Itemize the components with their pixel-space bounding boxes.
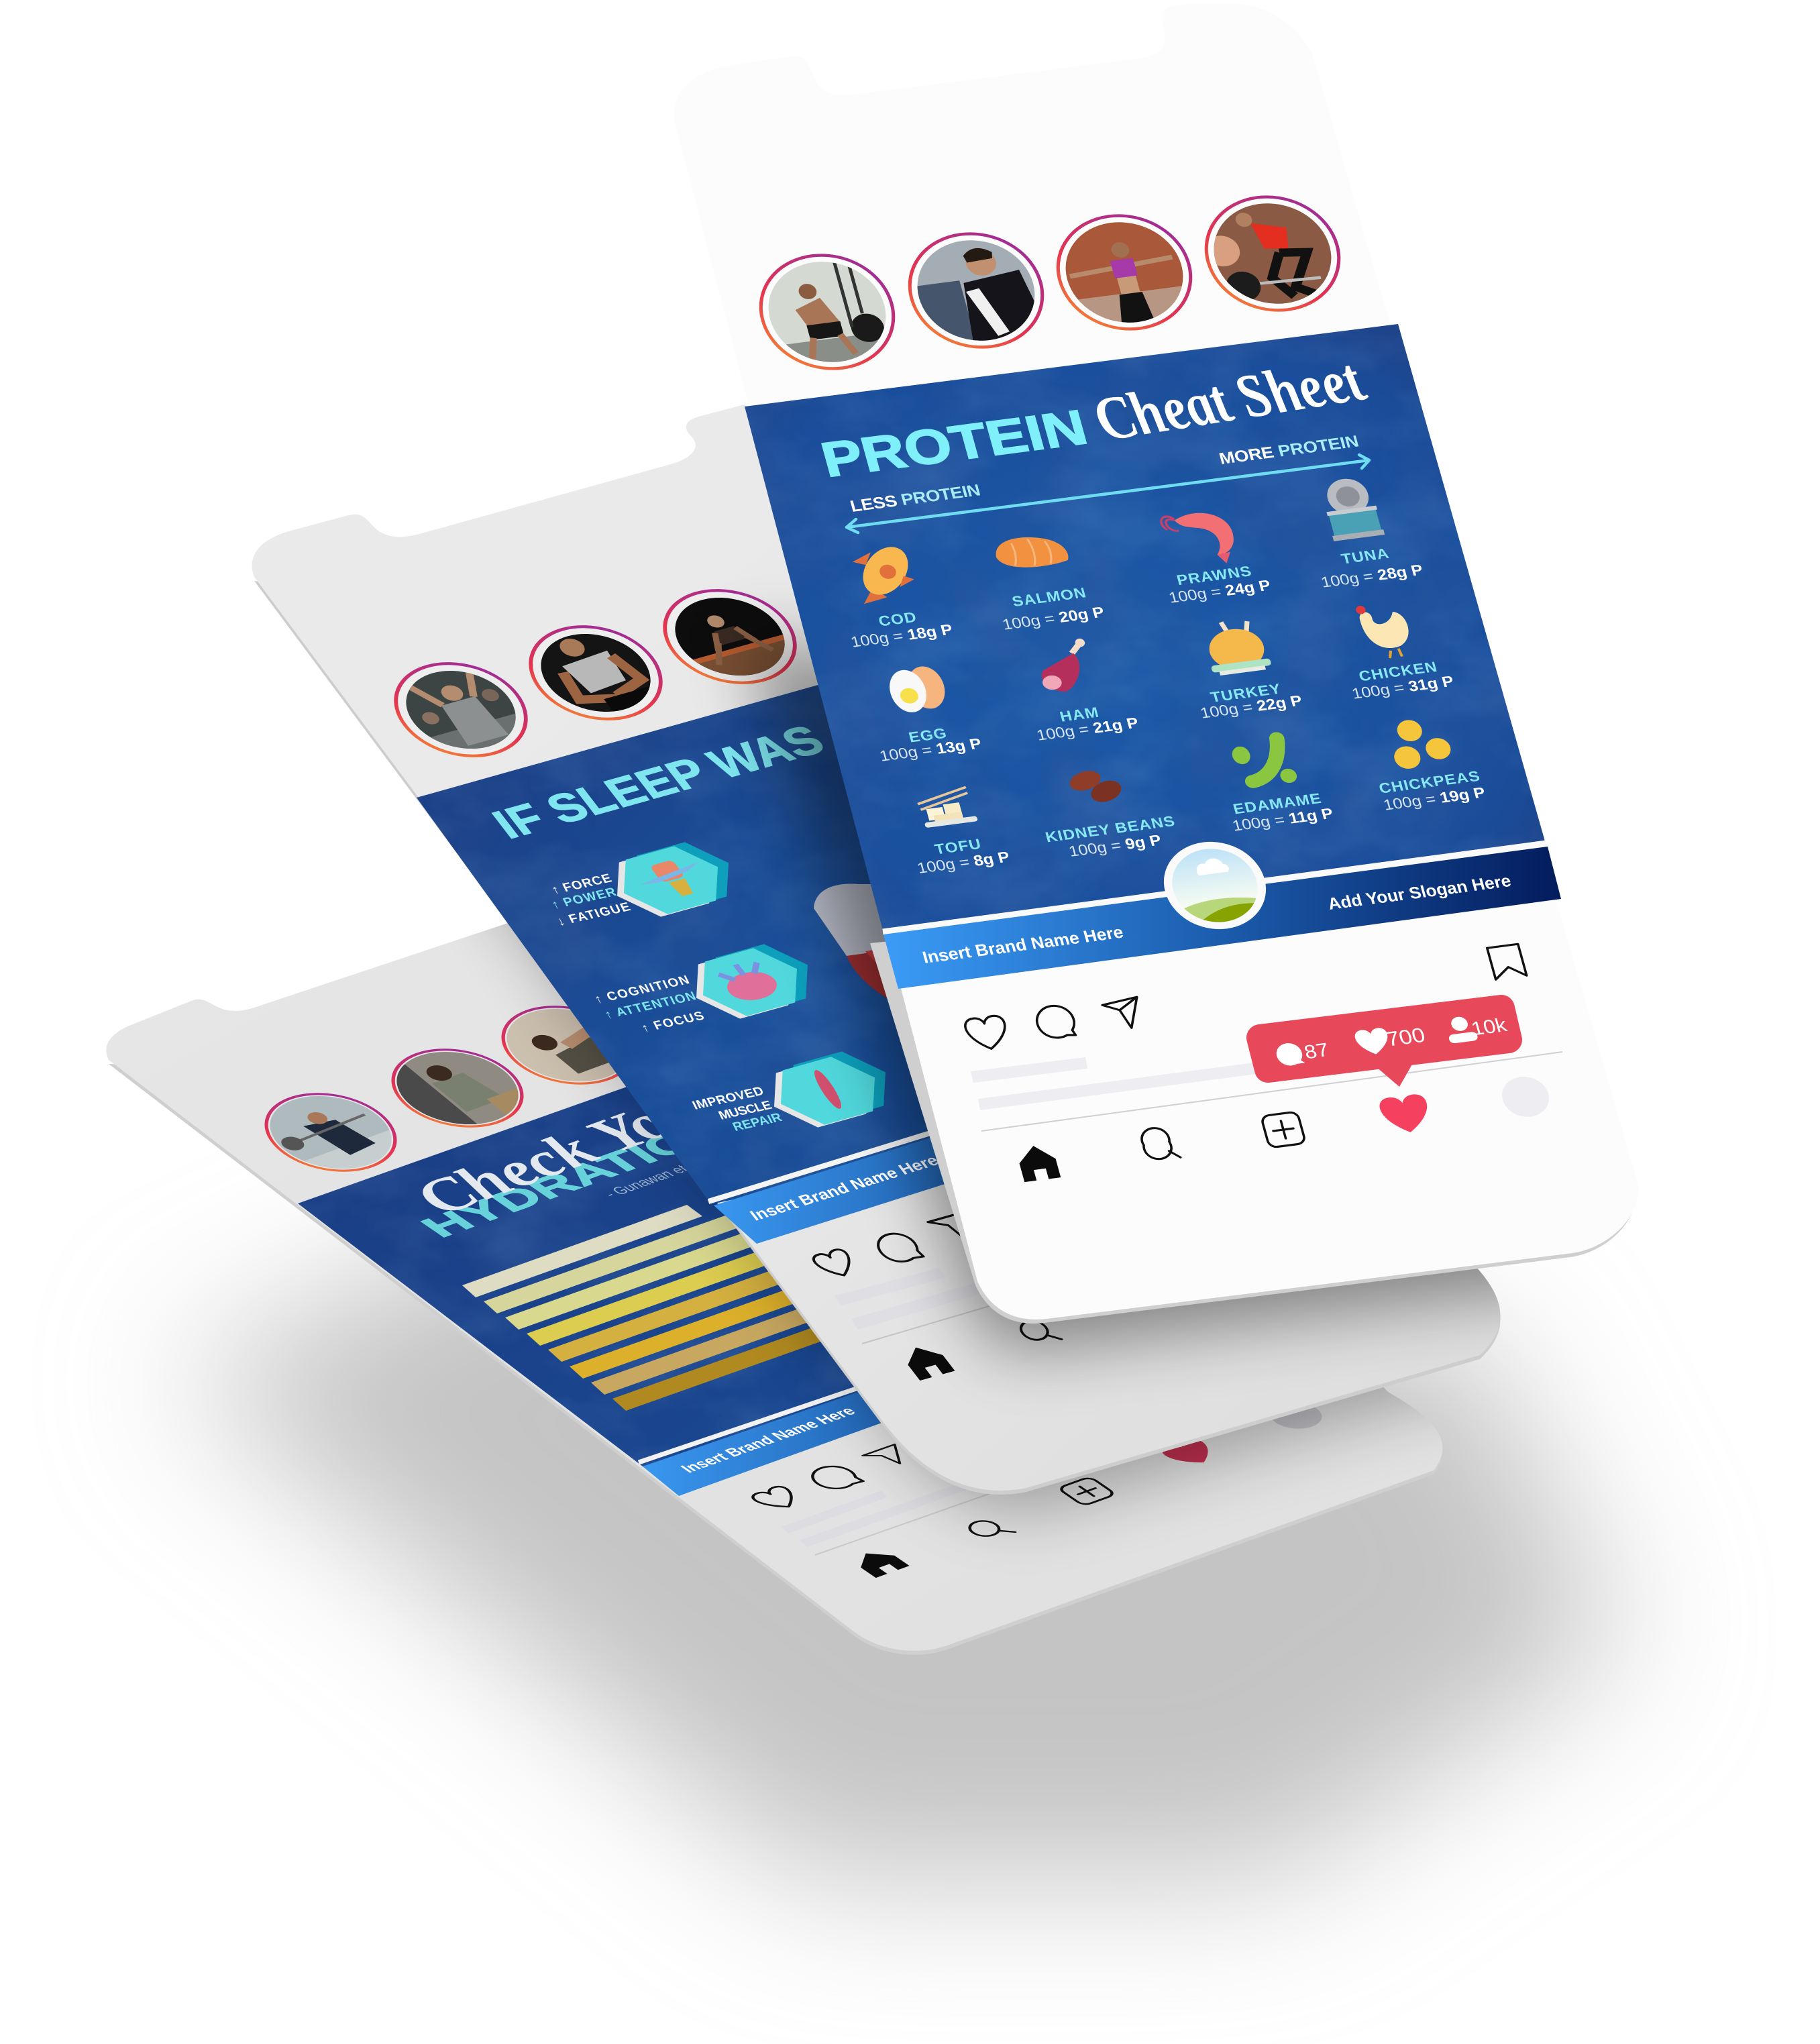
icon: brain bbox=[712, 958, 784, 1005]
text placeholder bars bbox=[971, 1057, 1256, 1110]
food: prawns: 100g = 24g P bbox=[1167, 577, 1273, 606]
food: chicken: CHICKEN bbox=[1357, 658, 1439, 684]
icon: comment bubble bbox=[1033, 1004, 1078, 1040]
food: tofu: TOFU bbox=[932, 835, 983, 857]
icon: fist with lightning bbox=[630, 854, 717, 904]
story 3: woman stretching bbox=[501, 1006, 619, 1085]
food: tofu: 100g = 8g P bbox=[915, 849, 1012, 877]
brand band: front phone: Insert Brand Name Here bbox=[920, 922, 1126, 967]
post actions: middle phone bbox=[810, 1212, 1073, 1381]
story circles: front phone bbox=[745, 188, 1354, 378]
story 1: barbell man bbox=[264, 1093, 397, 1172]
heading: Protein Cheat Sheet: Cheat Sheet bbox=[1078, 346, 1379, 453]
food: chickpeas bbox=[1377, 716, 1487, 814]
brand band: front phone: Add Your Slogan Here bbox=[1326, 871, 1513, 913]
food: egg: EGG bbox=[907, 724, 949, 745]
food: cod: 100g = 18g P bbox=[849, 621, 955, 651]
story 4: man in red shirt lifting bbox=[1191, 188, 1354, 319]
profile dot bbox=[1497, 1074, 1554, 1120]
food: tuna: 100g = 28g P bbox=[1319, 561, 1425, 591]
food: chicken: 100g = 31g P bbox=[1350, 673, 1456, 702]
icon: comment bubble bbox=[804, 1462, 865, 1493]
icon: heart bbox=[1353, 1027, 1392, 1057]
notification bubble: 87 700 10k bbox=[1260, 1008, 1509, 1087]
food: kidney beans: 100g = 9g P bbox=[1067, 832, 1163, 860]
food: edamame: 100g = 11g P bbox=[1230, 805, 1335, 835]
icon: home bbox=[1015, 1144, 1061, 1182]
icon: heart outline bbox=[810, 1248, 860, 1280]
food: kidney beans bbox=[1043, 764, 1177, 860]
brand band: back phone: Insert Brand Name Here bbox=[676, 1404, 860, 1475]
icon: search bbox=[1016, 1317, 1061, 1347]
icon: heart outline bbox=[963, 1015, 1011, 1051]
food: edamame bbox=[1229, 737, 1335, 835]
benefit 2: cognition attention focus: ↑ FOCUS bbox=[639, 1010, 707, 1035]
food: salmon: 100g = 20g P bbox=[1000, 604, 1106, 633]
benefit 2: cognition attention focus: ↑ ATTENTION bbox=[602, 989, 699, 1022]
food: prawns bbox=[1160, 508, 1273, 606]
benefit 3: improved muscle repair: REPAIR bbox=[731, 1111, 785, 1134]
post actions: front phone bbox=[963, 944, 1562, 1182]
food: tofu bbox=[915, 787, 1012, 877]
benefit 3: improved muscle repair: IMPROVED bbox=[690, 1085, 767, 1112]
icon: send bbox=[863, 1444, 914, 1470]
brand band: back phone bbox=[639, 1383, 902, 1496]
benefit 1: force power fatigue: ↑ FORCE bbox=[549, 871, 614, 897]
food: salmon: SALMON bbox=[1010, 584, 1088, 610]
benefit 1: force power fatigue: ↓ FATIGUE bbox=[555, 900, 633, 928]
icon: comment bubble bbox=[871, 1230, 924, 1265]
food: egg bbox=[877, 664, 983, 765]
cast shadow on middle phone bbox=[745, 634, 1631, 1350]
logo placeholder bbox=[1153, 836, 1277, 935]
text placeholder bars bbox=[835, 1268, 993, 1330]
notification bubble: 87 700 10k: 87 bbox=[1301, 1039, 1332, 1063]
icon: comment bbox=[1274, 1042, 1305, 1067]
brand band: front phone bbox=[883, 843, 1561, 989]
heading: Protein Cheat Sheet: PROTEIN bbox=[815, 399, 1093, 487]
icon: home bbox=[849, 1548, 910, 1578]
brand band: middle phone: Insert Brand Name Here bbox=[747, 1152, 943, 1224]
icon: heart outline bbox=[749, 1485, 804, 1513]
story 1: man deadlift bbox=[745, 246, 909, 378]
icon: red heart bbox=[1377, 1093, 1434, 1135]
profile dot bbox=[1260, 1397, 1332, 1434]
phone: front, protein cheat sheet bbox=[674, 3, 1638, 1324]
axis: less to more protein bbox=[847, 433, 1369, 533]
food: cod: COD bbox=[877, 608, 918, 629]
story 1: group overhead lift bbox=[370, 649, 552, 770]
benefit 3: improved muscle repair bbox=[690, 1045, 906, 1134]
heading: Protein Cheat Sheet bbox=[815, 346, 1379, 487]
story 2: muscular man bbox=[504, 612, 687, 733]
food: tuna bbox=[1318, 476, 1425, 591]
panel: hydration blue poster bbox=[298, 1087, 858, 1466]
brand band: middle phone bbox=[708, 1130, 966, 1244]
icon: muscle bbox=[810, 1069, 846, 1110]
heading: Check Your Hydration: - Gunawan et bbox=[600, 1163, 692, 1200]
benefit 2: cognition attention focus: ↑ COGNITION bbox=[592, 973, 692, 1006]
food: ham: HAM bbox=[1058, 704, 1101, 724]
cast shadow on back phone bbox=[274, 597, 1500, 1511]
food: edamame: EDAMAME bbox=[1231, 790, 1324, 817]
food: chickpeas: 100g = 19g P bbox=[1381, 784, 1487, 814]
icon: send bbox=[1102, 997, 1145, 1031]
story 3: woman on brick wall bbox=[1042, 207, 1206, 338]
phone: back, hydration post bbox=[106, 923, 1442, 1655]
phone: middle, sleep post bbox=[252, 405, 1631, 1495]
food: tuna: TUNA bbox=[1339, 545, 1391, 567]
icon: send bbox=[928, 1212, 983, 1245]
chart: urine colour stripes bbox=[462, 1194, 928, 1411]
food: chicken bbox=[1350, 600, 1456, 702]
icon: home bbox=[898, 1342, 955, 1381]
icon: search bbox=[1139, 1126, 1181, 1162]
heading: Check Your Hydration: HYDRATION bbox=[411, 1112, 743, 1244]
food: egg: 100g = 13g P bbox=[877, 735, 983, 765]
food: prawns: PRAWNS bbox=[1175, 563, 1254, 588]
notification bubble: 87 700 10k: 10k bbox=[1468, 1014, 1509, 1040]
panel: sleep blue poster bbox=[416, 644, 1020, 1207]
food: ham bbox=[1032, 638, 1140, 744]
graphic: sleep pill bbox=[814, 883, 966, 1020]
post actions: back phone bbox=[749, 1382, 1332, 1578]
icon: search bbox=[964, 1516, 1015, 1542]
icon: bookmark bbox=[1487, 944, 1527, 979]
story circles: back phone bbox=[264, 1006, 619, 1172]
notification bubble: 87 700 10k: 700 bbox=[1383, 1024, 1428, 1051]
food: salmon bbox=[992, 532, 1106, 633]
text placeholder bars bbox=[782, 1466, 1013, 1547]
story circles: middle phone bbox=[370, 576, 821, 770]
food: chickpeas: CHICKPEAS bbox=[1377, 767, 1482, 796]
panel: protein blue poster bbox=[738, 322, 1556, 932]
benefit 1: force power fatigue: ↑ POWER bbox=[549, 885, 619, 912]
axis: less to more protein: LESS PROTEIN bbox=[848, 482, 983, 515]
story 2: man with towel bbox=[894, 225, 1058, 356]
food: cod bbox=[843, 536, 955, 651]
axis: less to more protein: MORE PROTEIN bbox=[1217, 433, 1361, 468]
benefit 2: cognition attention focus bbox=[592, 938, 828, 1035]
heading: If sleep was: IF SLEEP WAS bbox=[484, 717, 834, 847]
icon: person bbox=[1444, 1015, 1479, 1044]
food: kidney beans: KIDNEY BEANS bbox=[1043, 812, 1177, 845]
icon: add bbox=[1058, 1476, 1116, 1506]
story 2: battle ropes woman bbox=[391, 1048, 524, 1128]
food: ham: 100g = 21g P bbox=[1034, 714, 1140, 744]
story 3: woman squat bbox=[639, 576, 821, 697]
food: turkey: TURKEY bbox=[1208, 680, 1283, 705]
heading: Check Your Hydration: Check Yo bbox=[396, 1097, 691, 1223]
icon: red heart bbox=[1158, 1437, 1222, 1469]
icon: add bbox=[1261, 1112, 1305, 1148]
drop shadow beneath phones bbox=[174, 1207, 1623, 1878]
benefit 3: improved muscle repair: MUSCLE bbox=[716, 1099, 775, 1122]
food: turkey bbox=[1198, 617, 1304, 722]
benefit 1: force power fatigue bbox=[549, 836, 749, 928]
food: turkey: 100g = 22g P bbox=[1198, 692, 1304, 722]
